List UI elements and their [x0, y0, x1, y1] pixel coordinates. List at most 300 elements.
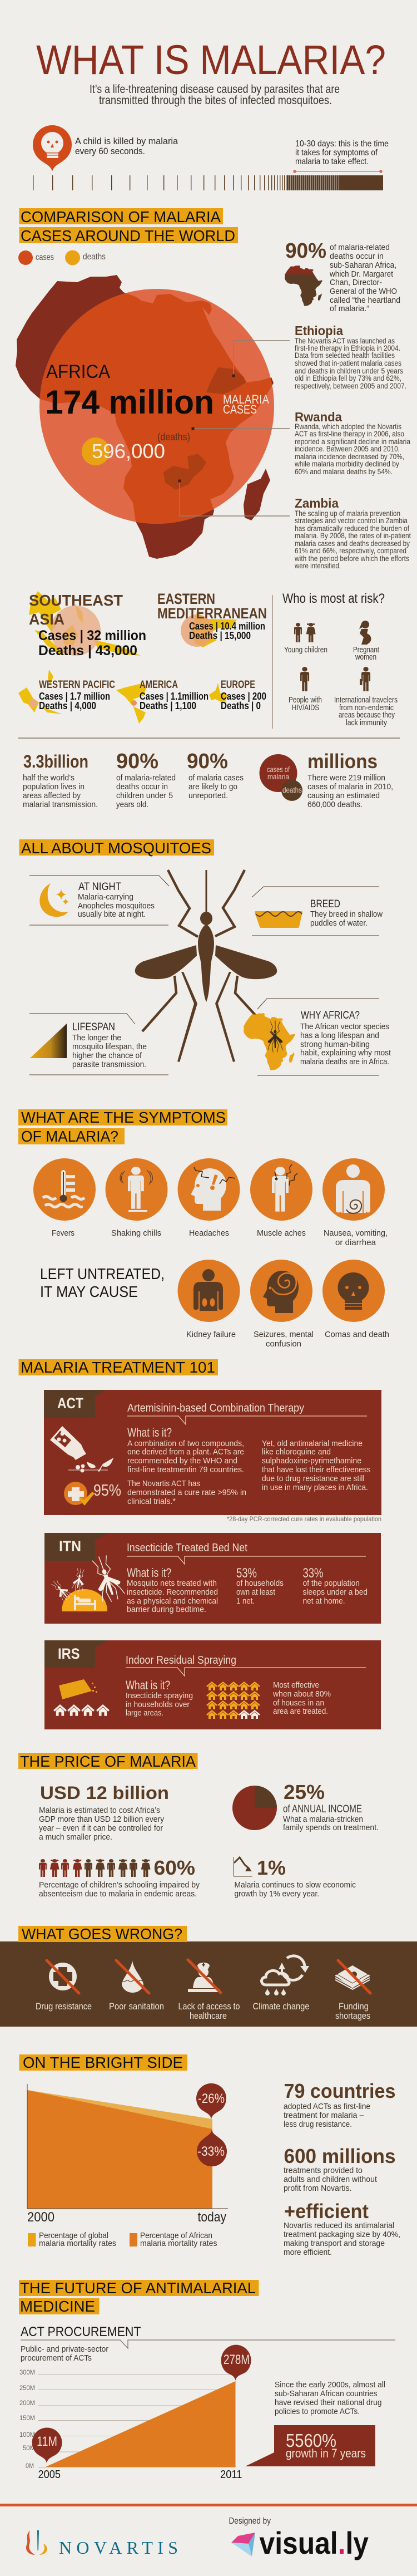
panel: ACT	[44, 1390, 381, 1515]
text: Cases | 1.1million	[140, 691, 209, 702]
y axis labels: 150M	[19, 2414, 35, 2422]
stat: 90% children under 5	[116, 750, 176, 809]
number: 596,000: 596,000	[92, 440, 165, 463]
stat: 60% schooling: Percentage of children’s schooling impaired by	[39, 1880, 200, 1890]
region: Western Pacific	[18, 670, 115, 714]
stat: 90% sub-Saharan: sub-Saharan Africa,	[330, 260, 396, 270]
figures: Deaths | 43,000	[38, 643, 137, 658]
icon: bed net and mosquitoes	[49, 1552, 126, 1611]
callout: 5560% growth: growth in 7 years	[286, 2446, 366, 2460]
callout: at night: AT NIGHT	[78, 881, 121, 893]
subtitle	[127, 1402, 367, 1424]
region: Ethiopia	[206, 367, 246, 394]
text: 10-30 days	[295, 139, 389, 166]
deaths circle	[82, 437, 110, 465]
second column: like chloroquine and	[262, 1447, 331, 1457]
connector lines	[180, 341, 290, 516]
symptom: headaches: Headaches	[189, 1229, 229, 1238]
heading: the price of malaria: THE PRICE OF MALARIA	[20, 1753, 196, 1770]
callout: why Africa	[244, 999, 391, 1075]
y axis labels: 0M	[26, 2462, 34, 2470]
stat: 3.3 billion: areas affected by	[23, 791, 81, 800]
stat: 53%: own at least	[236, 1587, 276, 1597]
number: 174 million: 174 million	[45, 384, 214, 421]
stat: 79 countries: 79 countries	[284, 2080, 396, 2102]
second column	[262, 1439, 370, 1492]
figures	[189, 621, 265, 641]
region: America	[116, 679, 209, 724]
bubble chart	[259, 754, 302, 801]
what is it: recommended by the WHO and	[127, 1456, 237, 1466]
region: Zambia	[163, 454, 206, 490]
text: Ethiopia	[295, 323, 406, 390]
what is it: first-line treatmentin 79 countries.	[127, 1465, 244, 1474]
icon: drug resistance	[36, 1960, 92, 2012]
heading: left untreated: IT MAY CAUSE	[40, 1283, 138, 1300]
text: Ethiopia: Ethiopia	[295, 323, 343, 338]
title: WHAT IS MALARIA?	[36, 37, 386, 83]
second column: due to drug resistance are still	[262, 1474, 365, 1483]
second column: sulphadoxine-pyrimethamine	[262, 1456, 361, 1466]
stat: 90% sub-Saharan: Chan, Director-	[330, 278, 382, 287]
heading: future of antimalarial medicine: THE FUTURE OF ANTIMALARIAL	[20, 2279, 256, 2297]
icon: lack of access to healthcare: Lack of access to	[178, 2001, 240, 2012]
text: Ethiopia: first-line therapy in Ethiopia in 2004.	[295, 344, 400, 352]
legend	[18, 250, 106, 265]
heading: left untreated	[40, 1265, 165, 1300]
text: drug policies: Since the early 2000s, almost all	[275, 2380, 385, 2390]
callout: at night: usually bite at night.	[78, 910, 146, 919]
what is it: What is it?	[126, 1678, 170, 1692]
stat: +efficient: Novartis reduced its antimalarial	[284, 2221, 394, 2230]
second column: Yet, old antimalarial medicine	[262, 1439, 363, 1448]
timeline ticks	[33, 175, 383, 190]
map: Africa with case and death circles	[16, 275, 290, 559]
y axis labels: 250M	[19, 2384, 35, 2392]
y axis labels: 100M	[19, 2431, 35, 2439]
text: child killed every 60 seconds: A child is killed by malaria	[75, 136, 178, 146]
text: most effective: when about 80%	[272, 1689, 331, 1699]
tag: IRS	[58, 1645, 80, 1662]
text: most effective: of houses in an	[273, 1698, 324, 1708]
icon: gold Africa with mosquito	[244, 1013, 295, 1070]
stat: 95%: 95%	[93, 1482, 121, 1500]
text	[221, 679, 266, 711]
panel: ITN	[44, 1533, 381, 1624]
region: Southeast Asia	[29, 591, 146, 658]
symptom: headaches	[178, 1158, 240, 1238]
text: Rwanda: Rwanda	[295, 410, 342, 424]
callout: breed: puddles of water.	[310, 918, 368, 928]
text: AMERICA	[140, 679, 178, 691]
stat: millions: There were 219 million	[307, 773, 385, 783]
text: drug policies: have revised their national drug	[275, 2398, 381, 2407]
symptom: shaking chills: Shaking chills	[111, 1229, 161, 1238]
title: EASTERN	[157, 591, 215, 607]
stat: 90% unreported: 90%	[187, 750, 228, 773]
chart: ACT procurement	[19, 2345, 251, 2481]
what is it: one derived from a plant. ACTs are	[127, 1447, 244, 1457]
labels: Pregnant	[353, 646, 379, 655]
subtitle: Indoor Residual Spraying	[126, 1654, 236, 1666]
x axis labels	[38, 2469, 242, 2481]
text: Rwanda	[294, 410, 410, 476]
legend: mortality rates: malaria mortality rates	[39, 2239, 116, 2248]
stat: 53%: 1 net.	[236, 1596, 255, 1606]
legend: cases	[36, 253, 54, 262]
text: child killed every 60 seconds	[75, 136, 178, 156]
icon: house grid 80%	[206, 1682, 260, 1719]
stat: 90% sub-Saharan: 90%	[285, 239, 326, 263]
stat: 90% sub-Saharan	[285, 239, 400, 313]
title: SOUTHEAST	[29, 592, 123, 609]
text: WESTERN PACIFIC	[39, 679, 115, 691]
labels: Young children	[284, 646, 327, 655]
gem mark	[231, 2533, 255, 2557]
stat: 90% sub-Saharan: General of the WHO	[330, 287, 397, 296]
text: Rwanda: ACT as first-line therapy in 2006, also	[295, 430, 404, 438]
label: deaths: (deaths)	[157, 431, 190, 443]
heading: comparison of malaria cases	[19, 208, 238, 244]
stat: millions	[259, 750, 393, 809]
labels: HIV/AIDS	[292, 704, 319, 712]
stat: 600 millions: 600 millions	[284, 2145, 396, 2167]
subtitle	[127, 1542, 366, 1564]
subtitle: Insecticide Treated Bed Net	[127, 1542, 247, 1554]
stat: 79 countries: less drug resistance.	[284, 2120, 352, 2129]
stat: USD 12 billion: year – even if it can be controlled for	[39, 1823, 163, 1833]
stat: 25% annual income: of ANNUAL INCOME	[283, 1803, 362, 1815]
stat: 3.3 billion: population lives in	[23, 782, 85, 792]
icon: skull map pin	[33, 125, 72, 171]
stat: 33%: net at home.	[302, 1596, 345, 1606]
icon: climate change: Climate change	[252, 2001, 309, 2012]
callout: why Africa: habit, explaining why most	[300, 1048, 391, 1058]
text	[39, 679, 115, 711]
callout: lifespan: LIFESPAN	[72, 1021, 115, 1033]
symptom: fevers: Fevers	[52, 1229, 75, 1238]
timeline bracket	[293, 170, 383, 173]
icon: traveler	[360, 667, 370, 691]
icon: pregnant woman	[359, 621, 371, 645]
text: most effective	[272, 1680, 331, 1716]
bubble chart: cases of	[267, 765, 290, 774]
text: Deaths | 4,000	[39, 700, 96, 711]
x axis labels: 2011	[220, 2469, 242, 2481]
text: Zambia: Zambia	[295, 496, 339, 510]
subheading: ACT procurement	[21, 2324, 395, 2363]
stat: 90% unreported: are likely to go	[188, 782, 237, 792]
labels: areas because they	[339, 711, 395, 720]
subtitle: Artemisinin-based Combination Therapy	[127, 1402, 304, 1414]
icon: lack of access to healthcare: healthcare	[190, 2010, 227, 2021]
heading: comparison of malaria cases: CASES AROUND THE WORLD	[21, 227, 235, 244]
label: malaria cases	[223, 392, 269, 416]
icon: declining chart	[234, 1857, 252, 1876]
bubble chart: deaths	[282, 785, 302, 794]
stat: 90% sub-Saharan: called “the heartland	[330, 296, 400, 305]
legend: mortality rates	[28, 2231, 217, 2248]
callout: why Africa: The African vector species	[300, 1022, 389, 1031]
stat: 25% annual income: 25%	[284, 1781, 325, 1803]
subtitle: It’s a life-threatening disease caused by parasites that are	[90, 83, 340, 96]
title: ASIA	[29, 611, 64, 628]
icon: gradient triangle	[30, 1024, 67, 1058]
stat: 3.3 billion: half the world’s	[23, 773, 75, 783]
what is it: large areas.	[126, 1708, 163, 1718]
text: Ethiopia: old in Ethiopia fell by 73% and 62%,	[295, 374, 401, 382]
x axis labels: 2005	[38, 2469, 61, 2481]
labels	[284, 646, 398, 727]
stat: millions: 660,000 deaths.	[307, 800, 363, 809]
y axis labels: 50M	[23, 2444, 35, 2452]
icon: cross badge	[64, 1482, 95, 1506]
text: 10-30 days: malaria to take effect.	[295, 157, 369, 166]
legend: mortality rates: malaria mortality rates	[140, 2239, 217, 2248]
what is it: clinical trials.*	[127, 1497, 176, 1506]
callout: at night	[29, 876, 169, 925]
stat: 90% unreported: unreported.	[188, 791, 228, 800]
heading: WHAT GOES WRONG?	[22, 1925, 182, 1943]
stat: 90% unreported	[187, 750, 244, 800]
text: drug policies: policies to promote ACTs.	[275, 2407, 360, 2416]
stat: millions: causing an estimated	[307, 791, 380, 800]
icon: row of children	[39, 1859, 151, 1877]
title	[157, 591, 267, 622]
icon: moon and stars	[39, 883, 69, 917]
stat: 25% annual income: What a malaria-stricken	[283, 1815, 363, 1824]
pin: -26%	[196, 2083, 226, 2119]
labels: from non-endemic	[339, 704, 394, 712]
what is it: A combination of two compounds,	[127, 1439, 244, 1448]
icon: person with HIV	[300, 667, 309, 691]
text: child killed every 60 seconds: every 60 seconds.	[75, 146, 145, 156]
stat: 600 millions: adults and children without	[284, 2175, 378, 2184]
y axis labels: 300M	[19, 2368, 35, 2376]
stat: 60% schooling: absenteeism due to malaria in endemic areas.	[39, 1889, 197, 1899]
stat: 600 millions	[284, 2145, 396, 2193]
subheading: ACT procurement: ACT PROCUREMENT	[21, 2324, 141, 2339]
subtitle: transmitted through the bites of infected mosquitoes.	[99, 94, 332, 107]
consequence: kidney failure	[178, 1260, 240, 1339]
stat: +efficient: making transport and storage	[284, 2239, 385, 2248]
callout: why Africa: malaria deaths are in Africa.	[300, 1057, 389, 1066]
stat: 53%: 53%	[236, 1566, 257, 1581]
stat: +efficient: treatment packaging size by 40%,	[284, 2230, 400, 2239]
stat: 90% children under 5: deaths occur in	[116, 782, 168, 792]
stat: 53%	[236, 1566, 284, 1606]
logo: Novartis: NOVARTIS	[59, 2538, 178, 2558]
symptom: nausea	[322, 1158, 388, 1247]
stat: USD 12 billion: a much smaller price.	[39, 1832, 112, 1842]
pin: 278M: 278M	[224, 2352, 250, 2367]
stat: 90% sub-Saharan: of malaria.“	[330, 304, 369, 313]
stat: 90% sub-Saharan: of malaria-related	[330, 243, 390, 252]
stat: 3.3 billion: malarial transmission.	[23, 800, 98, 809]
title: MEDITERRANEAN	[157, 605, 267, 622]
label: malaria cases: CASES	[223, 402, 257, 416]
icon: small Africa map	[285, 266, 322, 306]
stat: 3.3 billion	[23, 751, 98, 809]
footnote: *28-day PCR-corrected cure rates in evaluable population	[227, 1515, 381, 1523]
map	[116, 684, 147, 724]
icon: poor sanitation	[109, 1960, 164, 2012]
text: Zambia: The scaling up of malaria prevention	[295, 509, 400, 518]
tag	[44, 1640, 108, 1668]
pie chart	[232, 1786, 277, 1830]
pin: 11M	[32, 2427, 62, 2463]
consequence: comas and death	[322, 1260, 389, 1339]
icon: spray box and houses	[53, 1679, 110, 1716]
callout: why Africa: WHY AFRICA?	[301, 1010, 360, 1021]
map	[209, 683, 227, 702]
stat: USD 12 billion: GDP more than USD 12 billion every	[39, 1815, 164, 1824]
consequence: seizures	[250, 1260, 314, 1349]
second column: in use in many places in Africa.	[262, 1483, 368, 1492]
symptom: muscle aches: Muscle aches	[257, 1229, 306, 1238]
what is it: demonstrated a cure rate >95% in	[127, 1488, 246, 1497]
labels: women	[355, 653, 376, 662]
text: drug policies	[275, 2380, 385, 2416]
text: Rwanda: Rwanda, which adopted the Novartis	[295, 422, 401, 431]
text: Ethiopia: showed that in-patient malaria cases	[295, 359, 401, 367]
callout: lifespan: parasite transmission.	[72, 1060, 146, 1069]
tag: ITN	[59, 1538, 81, 1555]
symptom: muscle aches	[250, 1158, 312, 1238]
stat: USD 12 billion: USD 12 billion	[40, 1783, 169, 1803]
stat: USD 12 billion	[39, 1783, 169, 1842]
what is it: barrier during bedtime.	[127, 1605, 206, 1614]
text: Zambia	[294, 496, 411, 570]
icon: funding shortages: shortages	[335, 2010, 370, 2021]
stat: 33%: 33%	[302, 1566, 324, 1581]
callout: breed: They breed in shallow	[310, 910, 383, 919]
text: Rwanda: incidence. Between 2005 and 2010,	[295, 445, 400, 453]
subtitle	[126, 1654, 366, 1676]
stat: 79 countries: adopted ACTs as first-line	[284, 2102, 370, 2111]
icon: funding shortages	[335, 1960, 370, 2021]
icon: medicine bottle and plant	[50, 1426, 113, 1473]
stat: 33%: of the population	[302, 1579, 360, 1588]
tag: ACT	[57, 1395, 83, 1412]
callout: at night: Malaria-carrying	[78, 892, 133, 902]
callout: lifespan: mosquito lifespan, the	[72, 1042, 147, 1051]
subheading: ACT procurement: Public- and private-sector	[21, 2344, 108, 2354]
region: Europe	[209, 679, 266, 711]
icon: funding shortages: Funding	[339, 2001, 369, 2012]
subtitle	[90, 83, 340, 107]
pin: -33%: -33%	[197, 2144, 225, 2159]
stat: 90% children under 5: years old.	[116, 800, 148, 809]
logo: Novartis	[26, 2530, 178, 2558]
what is it: in households over	[126, 1700, 190, 1709]
bubble chart: malaria	[267, 772, 289, 781]
text: Cases | 200	[221, 691, 266, 702]
callout: lifespan: The longer the	[72, 1033, 121, 1043]
label: malaria cases: MALARIA	[223, 392, 269, 406]
axis labels	[27, 2210, 226, 2225]
stat: 25% annual income	[232, 1781, 379, 1832]
second column: that have lost their effectiveness	[262, 1465, 370, 1474]
figures: Cases | 10.4 million	[189, 621, 265, 632]
region: Eastern Mediterranean	[157, 591, 267, 647]
what is it: as a physical and chemical	[127, 1596, 218, 1606]
text: 10-30 days: 10-30 days: this is the time	[295, 139, 389, 149]
chart: mortality decline	[27, 2083, 228, 2225]
stat: 90% sub-Saharan: which Dr. Margaret	[329, 269, 394, 279]
pin: 278M	[221, 2345, 251, 2381]
symptom: nausea: Nausea, vomiting,	[324, 1229, 388, 1238]
heading: all about mosquitoes: ALL ABOUT MOSQUITOES	[21, 839, 211, 857]
text: Zambia: were intensified.	[294, 562, 341, 570]
symptom: shaking chills	[106, 1158, 168, 1238]
text: Rwanda: while malaria morbidity declined by	[294, 460, 399, 468]
text: EUROPE	[221, 679, 255, 691]
tag	[44, 1533, 108, 1561]
panel: what goes wrong band	[0, 1925, 417, 2027]
text: most effective: Most effective	[273, 1680, 319, 1690]
figures: Cases | 32 million	[38, 628, 146, 643]
text: Rwanda: 60% and malaria deaths by 54%.	[295, 468, 393, 476]
callout: why Africa: strong human-biting	[300, 1040, 370, 1049]
heading: comparison of malaria cases: COMPARISON OF MALARIA	[21, 208, 221, 225]
y axis labels: 200M	[19, 2399, 35, 2407]
what is it	[127, 1566, 218, 1614]
stat: USD 12 billion: Malaria is estimated to cost Africa’s	[39, 1806, 160, 1815]
callout: breed: BREED	[310, 898, 340, 910]
callout: 5560% growth: 5560%	[286, 2430, 336, 2451]
stat: 1% growth: growth by 1% every year.	[235, 1889, 319, 1899]
title	[29, 592, 123, 628]
text	[140, 679, 209, 711]
text: 10-30 days: it takes for symptoms of	[295, 148, 378, 158]
what is it: What is it?	[127, 1425, 172, 1439]
heading: future of antimalarial medicine: MEDICINE	[20, 2298, 95, 2315]
stat: 79 countries	[284, 2080, 396, 2129]
stat: 1% growth	[234, 1856, 356, 1899]
stat: 53%: of households	[236, 1579, 284, 1588]
stat: 33%	[302, 1566, 368, 1606]
illustration: mosquito	[135, 870, 277, 1062]
flame mark	[26, 2530, 47, 2555]
stat: 90% children under 5: children under 5	[116, 791, 173, 800]
y axis labels	[19, 2368, 35, 2470]
icon: climate change	[252, 1956, 309, 2012]
text: Ethiopia: and deaths in children under 5 years	[295, 367, 403, 375]
callout: lifespan	[29, 1014, 168, 1075]
text: drug policies: sub-Saharan African countries	[275, 2389, 377, 2398]
text: Ethiopia: The Novartis ACT was launched as	[295, 337, 395, 345]
stat: 90% children under 5: of malaria-related	[116, 773, 176, 783]
heading: symptoms of malaria	[18, 1109, 227, 1145]
icon: water bowl	[255, 911, 302, 928]
stat: 90% sub-Saharan: deaths occur in	[330, 252, 384, 261]
consequence: seizures: Seizures, mental	[254, 1330, 314, 1339]
heading: Who is most at risk?	[282, 591, 385, 606]
stat: 3.3 billion: 3.3billion	[23, 751, 88, 771]
legend: mortality rates: Percentage of global	[39, 2231, 108, 2240]
icon: lack of access to healthcare	[178, 1960, 240, 2021]
label: Africa: AFRICA	[46, 361, 110, 382]
stat: 600 millions: treatments provided to	[284, 2166, 363, 2175]
figures: Deaths | 15,000	[189, 630, 251, 641]
stat: millions: cases of malaria in 2010,	[307, 782, 393, 792]
pin: -33%	[197, 2130, 227, 2166]
text: Ethiopia: Data from selected health facilities	[295, 351, 395, 360]
stat: 60% schooling: 60%	[153, 1856, 195, 1879]
text: Deaths | 1,100	[140, 700, 196, 711]
stat: 60% schooling	[39, 1856, 200, 1899]
